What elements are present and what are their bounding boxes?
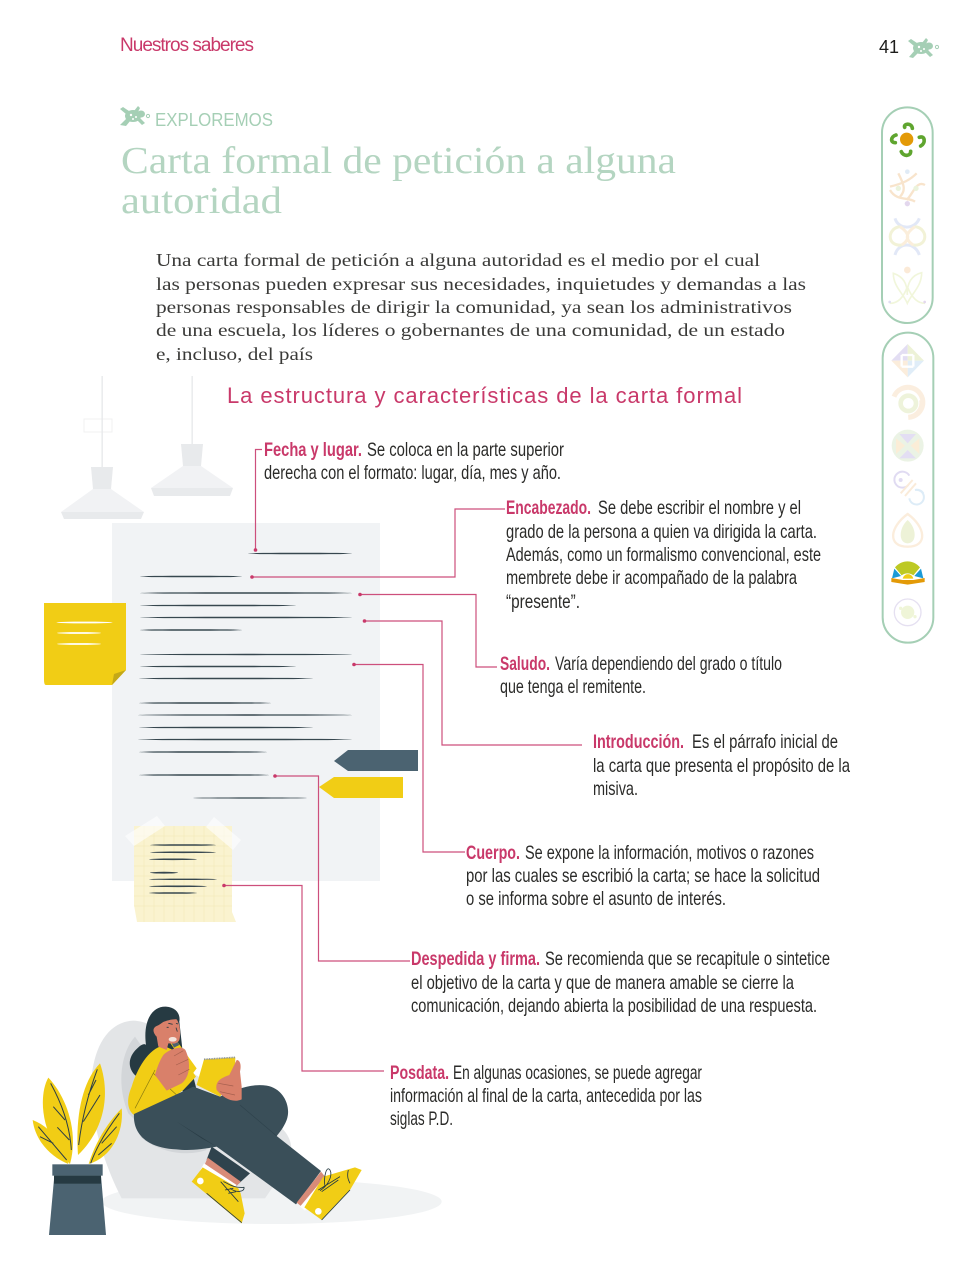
intro paragraph: e, incluso, del país bbox=[156, 344, 313, 364]
illustration: hanging lamps bbox=[61, 376, 233, 519]
icon: faded linked circles bbox=[894, 472, 924, 504]
icon: frog top right bbox=[908, 38, 939, 58]
connector: Cuerpo bbox=[352, 663, 465, 852]
connector: Saludo bbox=[358, 593, 497, 667]
text block: Fecha y lugar: Se coloca en la parte superior bbox=[367, 439, 564, 461]
icon: faded diamond bbox=[891, 344, 924, 377]
illustration: grid note with tape bbox=[125, 816, 241, 922]
illustration: yellow sticky note bbox=[44, 603, 126, 685]
text block: Posdata: En algunas ocasiones, se puede agregar bbox=[453, 1062, 702, 1084]
text block: Despedida y firma bbox=[411, 948, 830, 1017]
text block: Introducción bbox=[593, 731, 850, 800]
hair fringe bbox=[150, 1008, 177, 1027]
intro paragraph: de una escuela, los líderes o gobernantes de una comunidad, de un estado bbox=[156, 320, 785, 340]
hand holding pencil bbox=[155, 1048, 189, 1091]
jacket bbox=[128, 1046, 196, 1115]
text block: Despedida y firma: comunicación, dejando abierta la posibilidad de una respuesta. bbox=[411, 995, 817, 1017]
text block: Fecha y lugar bbox=[264, 439, 564, 484]
text block: Despedida y firma: Despedida y firma. bbox=[411, 948, 540, 970]
illustration: woman sitting with notepad and plant bbox=[33, 1007, 442, 1235]
icon: faded circle with cross bbox=[892, 430, 924, 462]
pants upper bbox=[134, 1085, 321, 1204]
icon: faded swirl figure bbox=[890, 169, 925, 206]
title: Carta formal de petición a alguna bbox=[121, 140, 676, 182]
title: autoridad bbox=[121, 180, 282, 222]
text block: Encabezado: Se debe escribir el nombre y el bbox=[598, 497, 801, 519]
hair back bbox=[130, 1007, 183, 1076]
notepad bbox=[197, 1057, 235, 1097]
running header: section name: Nuestros saberes bbox=[120, 35, 254, 56]
subheading: La estructura y características de la carta formal bbox=[227, 383, 742, 408]
plant bbox=[33, 1063, 122, 1235]
text block: Introducción: la carta que presenta el propósito de la bbox=[593, 755, 850, 777]
icon: faded knot figure bbox=[890, 218, 925, 255]
icon: frog beside EXPLOREMOS bbox=[120, 106, 150, 126]
intro paragraph bbox=[156, 250, 806, 364]
page number: 41 bbox=[879, 37, 899, 57]
intro paragraph: personas responsables de dirigir la comunidad, ya sean los administrativos bbox=[156, 297, 792, 317]
bean bag chair bbox=[91, 1021, 291, 1198]
text block: Cuerpo bbox=[466, 842, 820, 910]
icon: faded sprout figure bbox=[888, 267, 926, 303]
connector: Introducción bbox=[363, 619, 582, 745]
connector: Posdata bbox=[222, 884, 384, 1071]
text block: Cuerpo: Cuerpo. bbox=[466, 842, 520, 864]
text block: Encabezado: Encabezado. bbox=[506, 497, 591, 519]
text block: Posdata bbox=[390, 1062, 702, 1130]
panel: lower side navigation pill bbox=[883, 333, 933, 643]
text block: Despedida y firma: el objetivo de la carta y que de manera amable se cierre la bbox=[411, 972, 794, 994]
text block: Posdata: información al final de la carta, antecedida por las bbox=[390, 1085, 702, 1107]
connector: Encabezado bbox=[250, 509, 505, 579]
text block: Saludo: que tenga el remitente. bbox=[500, 676, 646, 698]
text block: Encabezado: “presente”. bbox=[506, 591, 580, 613]
intro paragraph: Una carta formal de petición a alguna autoridad es el medio por el cual bbox=[156, 250, 760, 270]
icon: faded ring bbox=[894, 387, 923, 417]
text block: Encabezado bbox=[506, 497, 821, 613]
panel: upper side navigation pill bbox=[882, 107, 933, 323]
text block: Encabezado: Además, como un formalismo convencional, este bbox=[506, 544, 821, 566]
intro paragraph: las personas pueden expresar sus necesidades, inquietudes y demandas a las bbox=[156, 274, 806, 294]
text block: Introducción: Es el párrafo inicial de bbox=[692, 731, 838, 753]
floor shadow bbox=[102, 1179, 442, 1224]
title bbox=[121, 140, 676, 222]
text block: Cuerpo: por las cuales se escribió la carta; se hace la solicitud bbox=[466, 865, 820, 887]
face bbox=[154, 1017, 180, 1050]
right ankle and shoe bbox=[297, 1172, 325, 1207]
text block: Posdata: Posdata. bbox=[390, 1062, 449, 1084]
connector: Despedida y firma bbox=[273, 774, 410, 961]
icon: active orange circle with green swirls bbox=[892, 124, 924, 155]
text block: Saludo: Varía dependiendo del grado o título bbox=[555, 653, 782, 675]
text block: Introducción: Introducción. bbox=[593, 731, 684, 753]
text block: Saludo bbox=[500, 653, 782, 698]
illustration: letter sheet bbox=[112, 523, 380, 881]
text block: Despedida y firma: Se recomienda que se recapitule o sintetice bbox=[545, 948, 830, 970]
text block: Fecha y lugar: derecha con el formato: lugar, día, mes y año. bbox=[264, 462, 561, 484]
text block: Cuerpo: Se expone la información, motivos o razones bbox=[525, 842, 814, 864]
connector: Fecha y lugar bbox=[254, 450, 262, 552]
hand with thumb bbox=[216, 1060, 242, 1101]
pencil bbox=[169, 1038, 197, 1075]
text block: Encabezado: membrete debe ir acompañado de la palabra bbox=[506, 567, 797, 589]
text block: Encabezado: grado de la persona a quien va dirigida la carta. bbox=[506, 521, 817, 543]
lower leg and left shoe bbox=[207, 1147, 250, 1184]
text block: Cuerpo: o se informa sobre el asunto de interés. bbox=[466, 888, 726, 910]
icon: faded leaf bbox=[893, 514, 922, 547]
section label: EXPLOREMOS bbox=[155, 110, 273, 130]
text block: Saludo: Saludo. bbox=[500, 653, 550, 675]
illustration: bookmark tags bbox=[319, 750, 418, 798]
shirt under jacket bbox=[180, 1077, 196, 1093]
text block: Introducción: misiva. bbox=[593, 778, 638, 800]
text block: Fecha y lugar: Fecha y lugar. bbox=[264, 439, 362, 461]
icon: active coloured fan bbox=[891, 561, 925, 585]
text block: Posdata: siglas P.D. bbox=[390, 1108, 453, 1130]
icon: faded splash in ring bbox=[894, 599, 921, 626]
